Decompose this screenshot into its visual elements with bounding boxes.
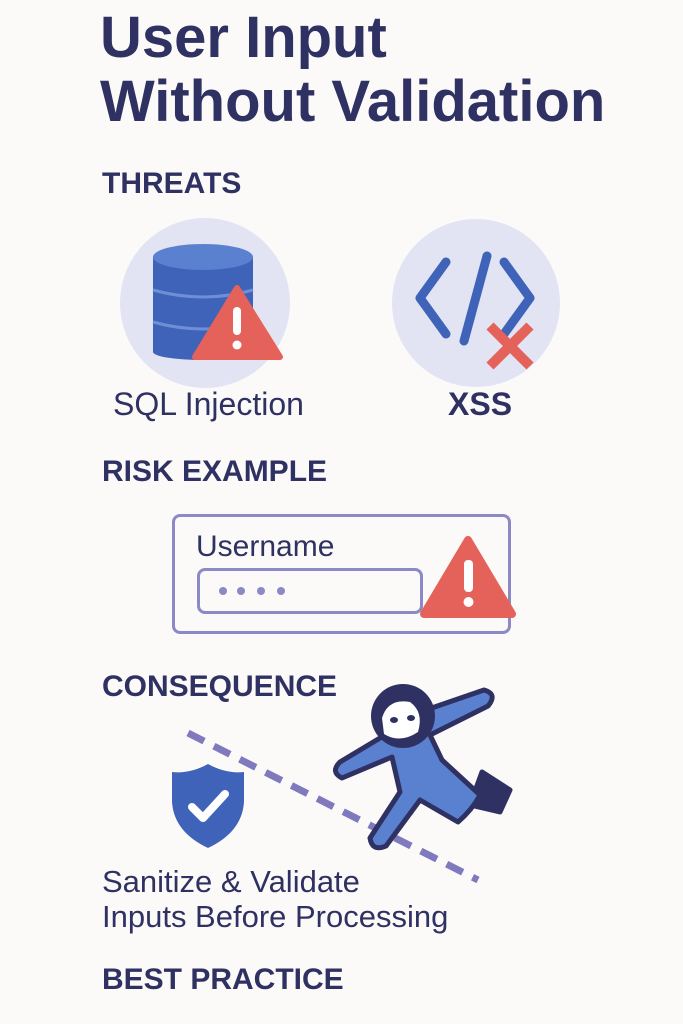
title: User Input bbox=[100, 5, 387, 70]
text: best practice advice bbox=[102, 864, 448, 934]
text: best practice advice: Inputs Before Processing bbox=[102, 899, 448, 934]
title bbox=[100, 5, 605, 134]
title: Without Validation bbox=[100, 69, 605, 134]
icon: intruder figure bbox=[332, 684, 513, 850]
input box illustration bbox=[172, 514, 511, 634]
icon: shield bbox=[172, 764, 244, 848]
heading: threats: THREATS bbox=[102, 167, 241, 200]
label: SQL Injection: SQL Injection bbox=[113, 386, 304, 422]
dashed boundary line bbox=[186, 730, 480, 884]
heading: risk example: RISK EXAMPLE bbox=[102, 455, 327, 488]
password field bbox=[197, 568, 423, 614]
heading: consequence: CONSEQUENCE bbox=[102, 670, 337, 703]
label: XSS: XSS bbox=[448, 386, 512, 422]
text: best practice advice: Sanitize & Validate bbox=[102, 864, 360, 899]
icon: warning bbox=[420, 536, 516, 618]
label: Username: Username bbox=[196, 530, 334, 563]
icon: SQL injection bbox=[120, 218, 290, 388]
icon: XSS bbox=[392, 219, 560, 387]
heading: best practice: BEST PRACTICE bbox=[102, 963, 344, 996]
